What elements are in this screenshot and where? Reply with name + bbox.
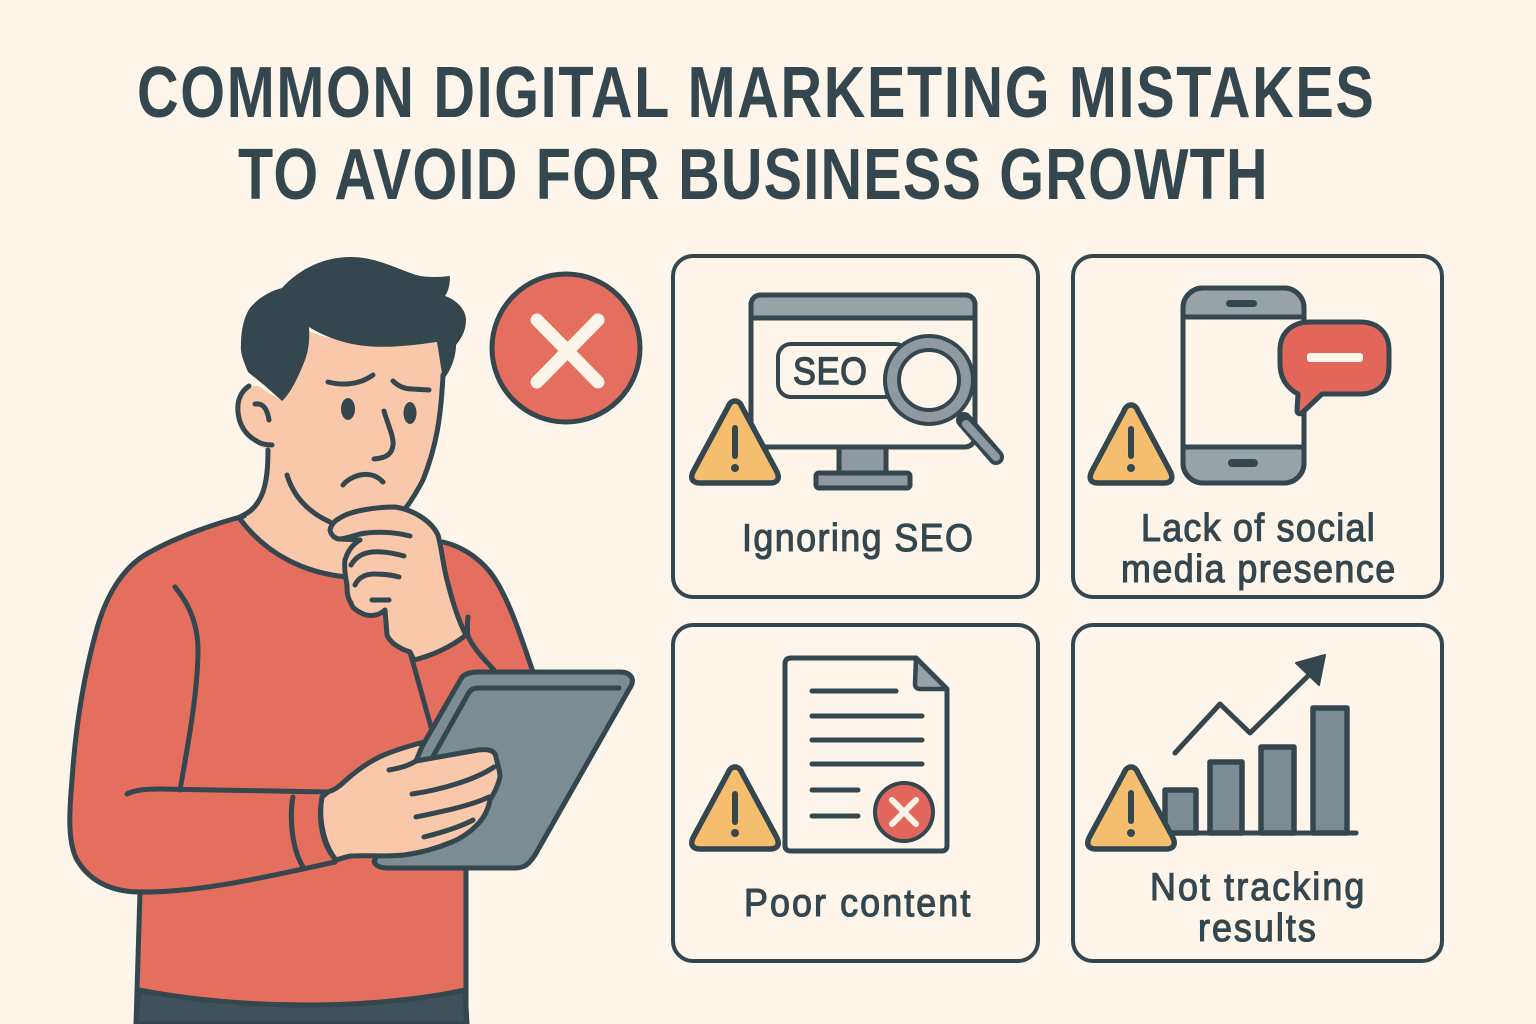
title bbox=[137, 52, 1374, 214]
panel: ignoring SEO bbox=[673, 256, 1038, 597]
panel: not tracking results bbox=[1073, 625, 1442, 961]
icon: warning triangle bbox=[692, 767, 778, 849]
sweater outline bbox=[70, 516, 533, 1024]
panel: poor content bbox=[673, 625, 1038, 961]
icon: red cross badge bbox=[875, 783, 933, 841]
icon: speech bubble bbox=[1280, 322, 1389, 414]
tablet hand finger lines bbox=[389, 761, 494, 837]
face bbox=[238, 330, 443, 522]
icon: document bbox=[785, 658, 947, 851]
hand holding tablet bbox=[321, 742, 500, 860]
title: COMMON DIGITAL MARKETING MISTAKES bbox=[137, 52, 1374, 132]
SEO search field: SEO bbox=[793, 349, 867, 392]
illustration: worried man with tablet bbox=[70, 257, 632, 1024]
label: Ignoring SEO bbox=[742, 516, 973, 559]
SEO search field bbox=[778, 344, 908, 397]
label: media presence bbox=[1121, 547, 1395, 590]
label: Poor content bbox=[744, 881, 971, 924]
label: Not tracking bbox=[1150, 865, 1364, 908]
red error badge bbox=[492, 274, 640, 422]
tablet bbox=[374, 672, 632, 868]
panel: lack of social media presence bbox=[1073, 256, 1442, 597]
trousers bbox=[136, 988, 467, 1024]
label bbox=[1121, 506, 1395, 590]
label: results bbox=[1198, 906, 1316, 949]
icon: warning triangle bbox=[1090, 405, 1172, 483]
icon: magnifying glass bbox=[892, 343, 996, 457]
icon: warning triangle bbox=[692, 401, 778, 483]
label: Lack of social bbox=[1141, 506, 1375, 549]
icon: monitor bbox=[751, 295, 975, 488]
title: TO AVOID FOR BUSINESS GROWTH bbox=[238, 134, 1268, 214]
hand on chin bbox=[330, 507, 466, 660]
icon: bar chart with arrow bbox=[1150, 655, 1356, 833]
neck bbox=[240, 400, 420, 577]
icon: smartphone bbox=[1183, 288, 1304, 483]
icon: warning triangle bbox=[1088, 767, 1174, 849]
hair bbox=[241, 257, 466, 401]
chin hand finger lines bbox=[338, 532, 410, 600]
eyebrows, eyes, nose and mouth bbox=[328, 375, 429, 485]
label bbox=[1150, 865, 1364, 949]
face outline bbox=[238, 375, 443, 522]
sweater bbox=[70, 519, 533, 1005]
